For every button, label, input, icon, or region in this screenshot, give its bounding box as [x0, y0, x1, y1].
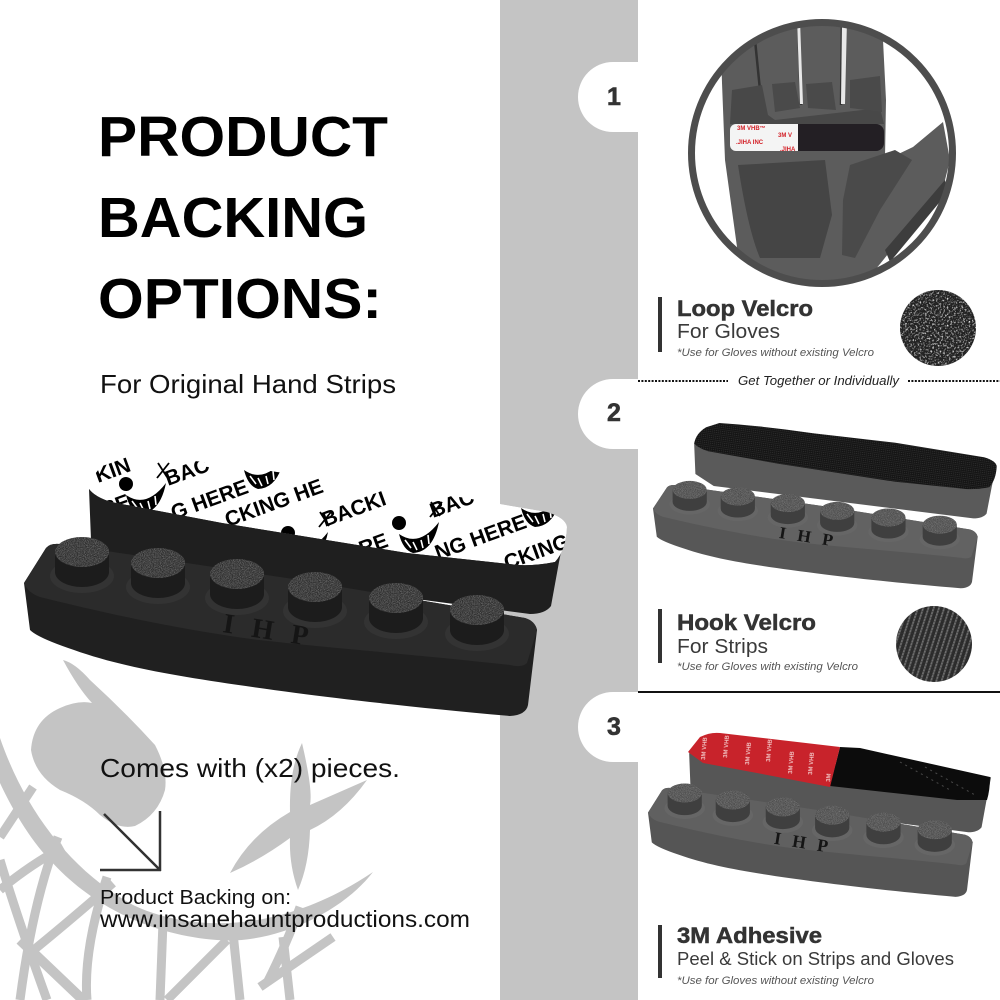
watermark smile — [0, 738, 373, 941]
background smiley watermark — [0, 660, 373, 1000]
watermark eye — [31, 660, 166, 827]
title: BACKING — [98, 186, 368, 250]
section divider — [638, 691, 1000, 693]
option 1 text: loop velcro: *Use for Gloves without existing Velcro — [677, 347, 874, 359]
back strip printed backing: KIN — [92, 454, 134, 488]
watermark cross eye — [230, 743, 367, 890]
liner print: 3M VHB — [808, 751, 816, 775]
option 1 text: loop velcro: For Gloves — [677, 321, 780, 343]
number tab 3 — [578, 692, 638, 762]
number tab 2: 2 — [607, 399, 621, 427]
option 2 strips: hook velcro — [653, 423, 997, 588]
product backing link: www.insanehauntproductions.com — [99, 906, 470, 932]
3M liner print: .JIHA INC — [736, 140, 764, 146]
3M liner print — [736, 125, 796, 153]
option 2 text: hook velcro: Hook Velcro — [677, 610, 816, 635]
back strip printed backing: BAC — [162, 454, 212, 491]
finger separations — [754, 28, 842, 105]
glove body — [722, 26, 949, 280]
back strip side — [89, 489, 566, 614]
swatch: loop velcro texture — [900, 290, 976, 366]
liner print: 3M — [826, 773, 833, 782]
circle ring — [692, 22, 952, 284]
watermark teeth — [0, 787, 333, 1000]
option 2 text: hook velcro: For Strips — [677, 636, 768, 658]
glove circle illustration — [692, 20, 952, 300]
back strip printed backing: NG HERE — [432, 510, 530, 565]
product backing link: Product Backing on: — [100, 887, 291, 909]
arrow down-right — [100, 811, 161, 871]
black adhesive face — [830, 747, 990, 800]
right white panel — [638, 0, 1000, 1000]
subtitle: For Original Hand Strips — [100, 369, 396, 399]
hero strips: black pair — [24, 438, 572, 716]
upper finger pads — [730, 85, 884, 124]
option 2 text: hook velcro — [658, 609, 858, 673]
back strip printed backing: G HERE — [168, 476, 251, 525]
velcro strip liner — [730, 124, 805, 151]
liner print: 3M VHB — [788, 750, 796, 774]
adhesive glare — [900, 762, 975, 795]
back strip printed backing: BAC — [427, 486, 477, 523]
option 3 text: 3M adhesive: Peel & Stick on Strips and Gloves — [677, 949, 954, 969]
hook strip front — [653, 481, 978, 588]
liner print: 3M VHB — [745, 741, 753, 765]
option 1 text: loop velcro: Loop Velcro — [677, 296, 813, 321]
option 3 text: 3M adhesive — [658, 923, 954, 987]
number tab 2 — [578, 379, 638, 449]
front strip with pads — [24, 537, 537, 716]
product backing link — [99, 887, 470, 932]
title — [98, 105, 388, 331]
back strip printed backing — [89, 458, 567, 566]
option 3 strips: 3M adhesive — [648, 733, 991, 897]
number tab 1 — [578, 62, 638, 132]
back strip printed backing: BACKI — [319, 487, 389, 532]
liner print: 3M VHB — [701, 736, 709, 760]
3M liner print: 3M VHB™ — [737, 125, 766, 132]
number tab 3: 3 — [607, 713, 621, 741]
number tab 1: 1 — [607, 83, 621, 111]
hook strip back — [694, 423, 997, 518]
3M liner print: .JIHA — [780, 147, 796, 153]
back strip printed backing: CKING — [501, 530, 572, 575]
divider: get together or individually: Get Together or Individually — [738, 373, 901, 388]
option 3 text: 3M adhesive: *Use for Gloves without existing Velcro — [677, 975, 874, 987]
option 1 text: loop velcro — [658, 296, 874, 359]
liner print: 3M VHB — [766, 738, 774, 762]
3M liner print: 3M V — [778, 133, 792, 139]
liner print: 3M VHB — [723, 734, 731, 758]
title: OPTIONS: — [98, 267, 382, 331]
adhesive strip back — [689, 753, 991, 832]
center grey band — [500, 0, 638, 1000]
velcro strip loop side — [798, 124, 884, 151]
title: PRODUCT — [98, 105, 388, 169]
swatch: hook velcro texture — [896, 606, 972, 682]
option 3 text: 3M adhesive: 3M Adhesive — [677, 923, 822, 948]
back strip printed backing: RE — [356, 529, 391, 561]
glove palm pads — [738, 160, 832, 258]
back strip printed backing: CKING HE — [222, 475, 326, 532]
back strip printed backing: RE — [98, 490, 133, 522]
red adhesive liner — [688, 733, 840, 787]
liner print — [701, 734, 833, 782]
adhesive strip front — [648, 784, 973, 897]
option 2 text: hook velcro: *Use for Gloves with existing Velcro — [677, 661, 858, 673]
caption: comes with two pieces: Comes with (x2) pieces. — [100, 753, 400, 783]
